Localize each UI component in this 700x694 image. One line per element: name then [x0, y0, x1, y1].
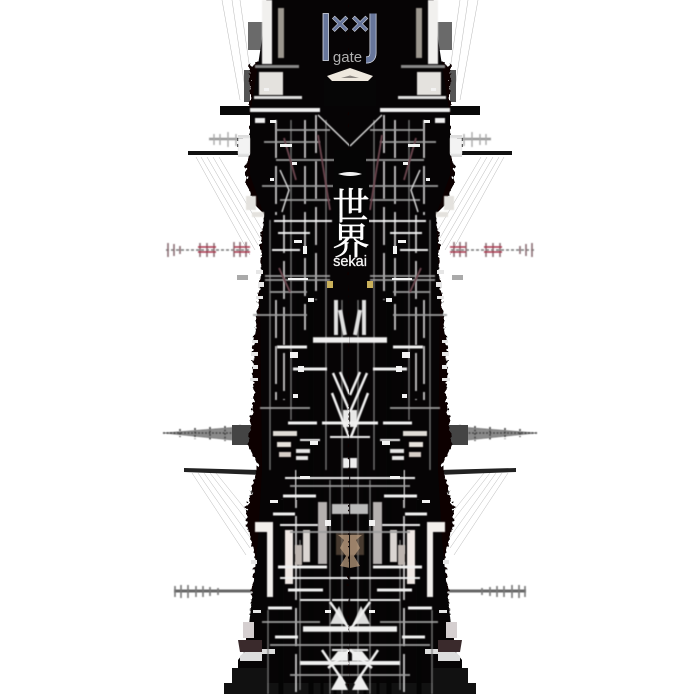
title: 世界: 界	[332, 211, 370, 265]
logo crosses: ×	[331, 6, 349, 41]
logo: gate	[323, 6, 373, 66]
title: 世界: 世	[332, 176, 370, 230]
title: 世界	[332, 176, 370, 265]
logo crosses: ×	[351, 6, 369, 41]
right half of tower (mirror)	[349, 0, 537, 694]
subtitle: sekai: sekai	[333, 254, 367, 270]
logo bracket left	[323, 14, 328, 60]
left half of tower	[163, 0, 351, 694]
central dark niche with diamond	[324, 68, 376, 106]
title backing column	[333, 150, 369, 255]
logo crosses	[331, 6, 369, 41]
logo word: gate	[333, 49, 362, 66]
logo bracket right	[366, 14, 373, 60]
